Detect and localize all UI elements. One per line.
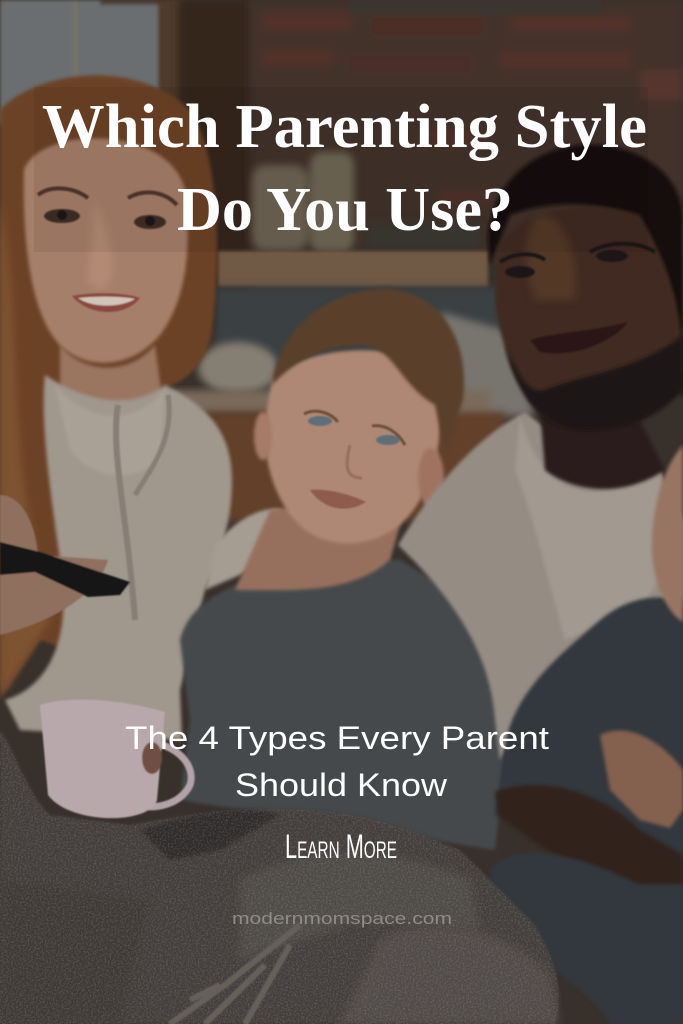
subtitle: The 4 Types Every Parent [125, 720, 549, 756]
brows and eyes [38, 188, 177, 229]
face [24, 138, 188, 363]
mug [40, 700, 191, 818]
title: Which Parenting Style [42, 93, 647, 161]
hoodie [5, 375, 232, 740]
eyes [304, 411, 405, 445]
window [0, 0, 182, 130]
baby [490, 445, 683, 1024]
man [398, 145, 683, 760]
blanket [0, 730, 560, 1024]
learn more: Learn More [285, 828, 397, 866]
nose and mouth [310, 445, 366, 509]
ears [254, 412, 272, 460]
hair [0, 75, 217, 700]
boy [180, 290, 505, 850]
hoodie [398, 412, 683, 760]
hoodie strings [116, 395, 169, 620]
woman [0, 75, 285, 740]
hair [272, 290, 464, 455]
title: Do You Use? [177, 176, 513, 244]
website: modernmomspace.com [232, 909, 452, 928]
wood post [178, 0, 252, 330]
sweater [180, 560, 505, 850]
neck [540, 410, 665, 489]
fringe [170, 925, 300, 1024]
neck [235, 490, 410, 590]
eyes [500, 244, 655, 278]
mouth [72, 293, 140, 312]
beard [505, 335, 683, 430]
mouth [530, 322, 628, 353]
shelf jars [252, 152, 480, 252]
neck [60, 345, 165, 420]
man's hand [495, 785, 683, 885]
subtitle [125, 720, 549, 803]
shelf [218, 251, 488, 287]
arm across boy [205, 509, 285, 590]
pillow and counter [198, 342, 278, 394]
brick wall [250, 0, 683, 260]
man's legs [490, 853, 683, 1024]
hand with remote [0, 495, 130, 635]
face [495, 207, 683, 428]
title [42, 93, 647, 244]
lower wall [215, 287, 505, 387]
subtitle: Should Know [235, 767, 448, 803]
head [265, 350, 442, 543]
baby head [652, 445, 683, 622]
hair [488, 145, 683, 400]
baby outfit [495, 597, 683, 860]
baby hand [600, 730, 683, 828]
title band [34, 87, 648, 252]
